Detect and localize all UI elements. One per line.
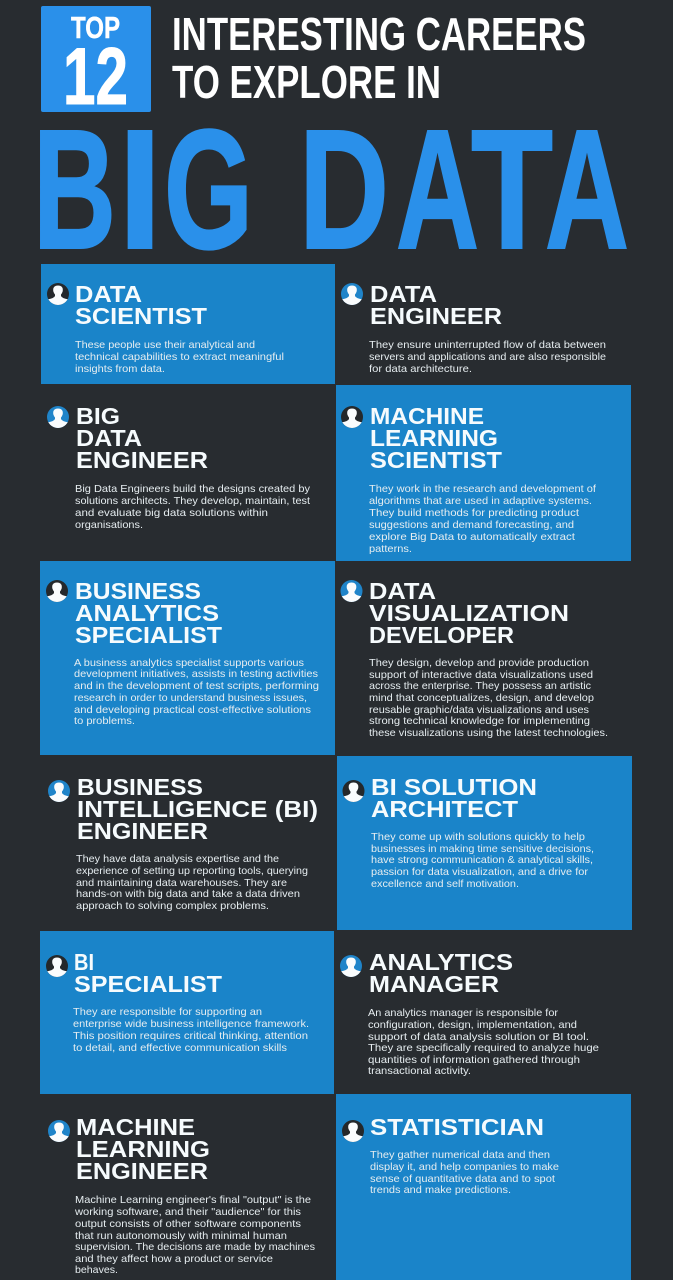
panel: big data engineer bbox=[47, 403, 311, 531]
text: big data engineer description: and evaluate big data solutions within bbox=[75, 508, 268, 519]
heading: business intelligence engineer: BUSINESS bbox=[77, 774, 203, 800]
text: business intelligence engineer description: hands-on with big data and take a data driven bbox=[76, 889, 300, 900]
text: machine learning engineer description: and they affect how a product or service bbox=[75, 1254, 273, 1265]
icon: person bbox=[340, 955, 362, 977]
heading: machine learning scientist: SCIENTIST bbox=[370, 447, 502, 473]
text: data scientist description bbox=[75, 340, 284, 375]
title: big data: A bbox=[545, 95, 629, 285]
text: business analytics specialist description: and developing practical cost-effective solutions bbox=[74, 705, 311, 716]
text: data engineer description: They ensure uninterrupted flow of data between bbox=[369, 340, 606, 351]
heading: data engineer: ENGINEER bbox=[370, 303, 502, 329]
text: machine learning scientist description: patterns. bbox=[369, 544, 412, 555]
title: big data: B bbox=[33, 95, 116, 285]
icon: person bbox=[48, 780, 70, 802]
icon: person bbox=[46, 580, 68, 602]
text: machine learning engineer description: that run autonomously with minimal human bbox=[75, 1231, 287, 1242]
title: big data: G bbox=[164, 95, 253, 285]
panel: business analytics specialist bbox=[40, 561, 335, 755]
panel: business intelligence engineer bbox=[48, 774, 318, 912]
text: bi specialist description: This position requires critical thinking, attention bbox=[73, 1031, 308, 1042]
text: bi specialist description: They are responsible for supporting an bbox=[73, 1007, 262, 1018]
text: analytics manager description bbox=[368, 1008, 599, 1077]
heading: analytics manager: ANALYTICS bbox=[369, 949, 513, 975]
text: statistician description: display it, and help companies to make bbox=[370, 1162, 559, 1173]
icon: person bbox=[342, 780, 364, 802]
text: business analytics specialist description: to problems. bbox=[74, 716, 135, 727]
text: analytics manager description: transactional activity. bbox=[368, 1066, 471, 1077]
text: bi solution architect description: passion for data visualization, and a drive for bbox=[371, 867, 589, 878]
text: data visualization developer description: mind that conceptualizes, design, and develop bbox=[369, 693, 594, 704]
text: data visualization developer description: reusable graphic/data visualizations and uses bbox=[369, 705, 589, 716]
heading: bi specialist: BI bbox=[74, 949, 94, 975]
text: bi solution architect description: They come up with solutions quickly to help bbox=[371, 832, 585, 843]
text: bi solution architect description: have strong communication & analytical skills, bbox=[371, 855, 593, 866]
title: big data: I bbox=[118, 95, 162, 285]
heading: data visualization developer: DEVELOPER bbox=[369, 622, 514, 648]
heading: big data engineer bbox=[76, 403, 208, 473]
text: big data engineer description: solutions architects. They develop, maintain, test bbox=[75, 496, 310, 507]
text: machine learning engineer description: behaves. bbox=[75, 1265, 118, 1276]
heading: data scientist: DATA bbox=[75, 281, 142, 307]
text: bi solution architect description: excellence and self motivation. bbox=[371, 879, 519, 890]
heading: data scientist bbox=[75, 281, 207, 329]
text: business analytics specialist description: A business analytics specialist supports various bbox=[74, 658, 304, 669]
panel: machine learning scientist bbox=[336, 385, 631, 561]
text: analytics manager description: configuration, design, implementation, and bbox=[368, 1020, 577, 1031]
icon: person bbox=[342, 1120, 364, 1142]
text: data visualization developer description: strong technical knowledge for implementing bbox=[369, 716, 590, 727]
heading: business intelligence engineer: INTELLIGENCE (BI) bbox=[77, 796, 318, 822]
text: data engineer description bbox=[369, 340, 606, 375]
panel: bi specialist bbox=[40, 931, 334, 1094]
icon: person bbox=[341, 406, 363, 428]
heading: data engineer bbox=[370, 281, 502, 329]
text: machine learning scientist description: algorithms that are used in adaptive systems. bbox=[369, 496, 592, 507]
text: statistician description: trends and make predictions. bbox=[370, 1185, 511, 1196]
heading: analytics manager bbox=[369, 949, 513, 997]
text: analytics manager description: They are specifically required to analyze huge bbox=[368, 1043, 599, 1054]
text: big data engineer description bbox=[75, 484, 311, 531]
heading: machine learning engineer: LEARNING bbox=[76, 1136, 210, 1162]
icon: person bbox=[341, 283, 363, 305]
text: business intelligence engineer description bbox=[76, 854, 308, 912]
icon: person bbox=[47, 406, 69, 428]
text: data visualization developer description: across the enterprise. They possess an artistic bbox=[369, 681, 591, 692]
heading: data engineer: DATA bbox=[370, 281, 437, 307]
text: machine learning engineer description: working software, and their "audience" for this bbox=[74, 1207, 301, 1218]
heading: data visualization developer: DATA bbox=[369, 578, 436, 604]
text: data scientist description: technical capabilities to extract meaningful bbox=[75, 352, 284, 363]
heading: machine learning engineer: MACHINE bbox=[76, 1114, 195, 1140]
heading: machine learning scientist bbox=[370, 403, 502, 473]
heading: bi specialist: SPECIALIST bbox=[74, 971, 222, 997]
text: bi specialist description: to detail, and effective communication skills bbox=[73, 1043, 287, 1054]
heading: business analytics specialist bbox=[75, 578, 222, 648]
text: bi specialist description bbox=[73, 1007, 309, 1054]
text: machine learning engineer description: output consists of other software components bbox=[75, 1219, 301, 1230]
text: statistician description bbox=[370, 1150, 559, 1196]
text: machine learning engineer description bbox=[74, 1195, 315, 1276]
text: machine learning scientist description: suggestions and demand forecasting, and bbox=[369, 520, 574, 531]
text: business intelligence engineer description: and maintaining data warehouses. They are bbox=[76, 878, 287, 889]
heading: data scientist: SCIENTIST bbox=[75, 303, 207, 329]
panel: statistician bbox=[336, 1094, 631, 1280]
text: machine learning engineer description: supervision. The decisions are made by machines bbox=[75, 1242, 315, 1253]
panel: data visualization developer bbox=[340, 578, 608, 739]
heading: big data engineer: ENGINEER bbox=[76, 447, 208, 473]
text: data visualization developer description: support of interactive data visualizations used bbox=[369, 670, 593, 681]
icon: person bbox=[48, 1120, 70, 1142]
panel: data engineer bbox=[341, 281, 606, 375]
text: bi specialist description: enterprise wide business intelligence framework. bbox=[73, 1019, 309, 1030]
badge: top 12 bbox=[41, 6, 151, 122]
heading: machine learning engineer: ENGINEER bbox=[76, 1158, 208, 1184]
text: bi solution architect description bbox=[371, 832, 594, 890]
title: big data: D bbox=[299, 95, 389, 285]
text: data scientist description: insights from data. bbox=[75, 364, 165, 375]
text: machine learning scientist description: They build methods for predicting product bbox=[369, 508, 579, 519]
text: business intelligence engineer description: They have data analysis expertise and the bbox=[76, 854, 279, 865]
heading: data visualization developer bbox=[369, 578, 569, 648]
text: business analytics specialist description: and in the development of test scripts, performing bbox=[74, 681, 319, 692]
text: big data engineer description: organisations. bbox=[75, 520, 143, 531]
heading: bi solution architect: ARCHITECT bbox=[371, 796, 518, 822]
text: data visualization developer description: these visualizations using the latest technologies. bbox=[369, 728, 608, 739]
text: analytics manager description: quantities of information gathered through bbox=[368, 1055, 580, 1066]
title: big data: A bbox=[396, 95, 479, 285]
badge: top 12: TOP bbox=[71, 10, 120, 45]
panel: data scientist bbox=[41, 264, 335, 384]
text: machine learning scientist description: explore Big Data to automatically extract bbox=[369, 532, 575, 543]
text: machine learning engineer description: Machine Learning engineer's final "output" is the bbox=[75, 1195, 311, 1206]
heading: big data engineer: BIG bbox=[76, 403, 120, 429]
heading: machine learning scientist: MACHINE bbox=[370, 403, 484, 429]
text: analytics manager description: An analytics manager is responsible for bbox=[368, 1008, 559, 1019]
text: data visualization developer description bbox=[369, 658, 608, 739]
panel: machine learning engineer bbox=[48, 1114, 315, 1276]
title: interesting careers: TO EXPLORE IN bbox=[172, 56, 441, 108]
text: business analytics specialist description: development initiatives, assists in testing activities bbox=[74, 669, 318, 680]
heading: bi solution architect bbox=[371, 774, 537, 822]
text: statistician description: They gather numerical data and then bbox=[370, 1150, 550, 1161]
heading: business analytics specialist: BUSINESS bbox=[75, 578, 201, 604]
text: analytics manager description: support of data analysis solution or BI tool. bbox=[368, 1032, 589, 1043]
text: bi solution architect description: businesses in making time sensitive decisions, bbox=[371, 844, 594, 855]
title: big data bbox=[33, 95, 629, 285]
panel: bi solution architect bbox=[337, 756, 632, 930]
text: machine learning scientist description: They work in the research and development of bbox=[369, 484, 596, 495]
icon: person bbox=[340, 580, 362, 602]
badge: top 12: 12 bbox=[63, 32, 128, 122]
heading: machine learning scientist: LEARNING bbox=[370, 425, 498, 451]
text: data engineer description: servers and applications and are also responsible bbox=[369, 352, 606, 363]
text: business analytics specialist description bbox=[74, 658, 319, 727]
title: interesting careers bbox=[172, 8, 586, 108]
heading: statistician: STATISTICIAN bbox=[370, 1114, 544, 1140]
text: business analytics specialist description: research in order to understand business issues, bbox=[74, 693, 307, 704]
heading: business analytics specialist: ANALYTICS bbox=[75, 600, 219, 626]
text: data scientist description: These people use their analytical and bbox=[75, 340, 255, 351]
heading: big data engineer: DATA bbox=[76, 425, 142, 451]
heading: business intelligence engineer bbox=[77, 774, 318, 844]
icon: person bbox=[47, 283, 69, 305]
text: data visualization developer description: They design, develop and provide production bbox=[369, 658, 589, 669]
heading: business analytics specialist: SPECIALIST bbox=[75, 622, 222, 648]
text: business intelligence engineer description: experience of setting up reporting tools, querying bbox=[76, 866, 308, 877]
text: big data engineer description: Big Data Engineers build the designs created by bbox=[75, 484, 311, 495]
heading: bi solution architect: BI SOLUTION bbox=[371, 774, 537, 800]
heading: analytics manager: MANAGER bbox=[369, 971, 499, 997]
text: machine learning scientist description bbox=[369, 484, 596, 555]
title: big data: T bbox=[471, 95, 553, 285]
text: data engineer description: for data architecture. bbox=[369, 364, 472, 375]
text: statistician description: sense of quantitative data and to spot bbox=[370, 1174, 555, 1185]
heading: business intelligence engineer: ENGINEER bbox=[77, 818, 208, 844]
text: business intelligence engineer description: approach to solving complex problems. bbox=[76, 901, 269, 912]
panel: analytics manager bbox=[340, 949, 599, 1077]
icon: person bbox=[46, 955, 68, 977]
heading: machine learning engineer bbox=[76, 1114, 210, 1184]
heading: bi specialist bbox=[74, 949, 222, 997]
heading: data visualization developer: VISUALIZATION bbox=[369, 600, 569, 626]
